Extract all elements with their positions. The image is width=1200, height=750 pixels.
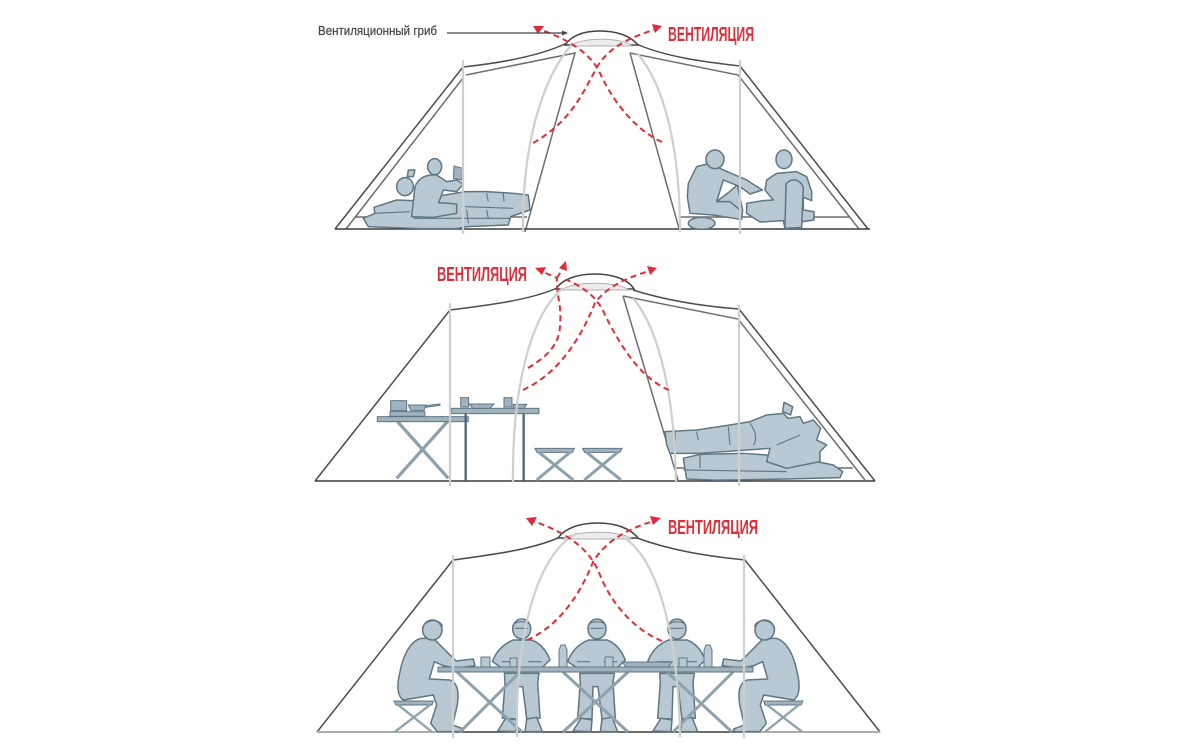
diagram: tent 3 - five people at table [317,516,880,738]
label: ventilation: ВЕНТИЛЯЦИЯ [668,517,758,539]
arch poles [463,43,740,234]
callout: ventilation mushroom: Вентиляционный гриб [318,23,437,38]
airflow arrows [533,24,662,143]
people: reader and sleeper [363,159,530,229]
ventilation mushroom [558,523,638,539]
airflow arrows [523,261,669,390]
tent frame [317,538,880,732]
label: ventilation: ВЕНТИЛЯЦИЯ [437,264,527,286]
people: two sleeping [665,402,843,480]
camp kitchen tables [377,398,539,481]
arch poles [453,533,744,738]
ventilation mushroom [565,31,638,46]
tent frame [335,43,870,232]
ventilation mushroom [556,274,634,290]
seated people [394,619,803,732]
diagram: tent 1 - sleeping and sitting [318,23,870,234]
label: ventilation: ВЕНТИЛЯЦИЯ [668,24,754,46]
airflow arrows [526,516,662,641]
long table [438,645,753,732]
arch poles [450,288,739,486]
callout: ventilation mushroom [318,23,568,38]
people: two sitting [687,150,814,229]
tent frame [315,288,875,481]
stools [535,448,622,480]
diagram: tent 2 - kitchen and sleeping [315,261,875,486]
